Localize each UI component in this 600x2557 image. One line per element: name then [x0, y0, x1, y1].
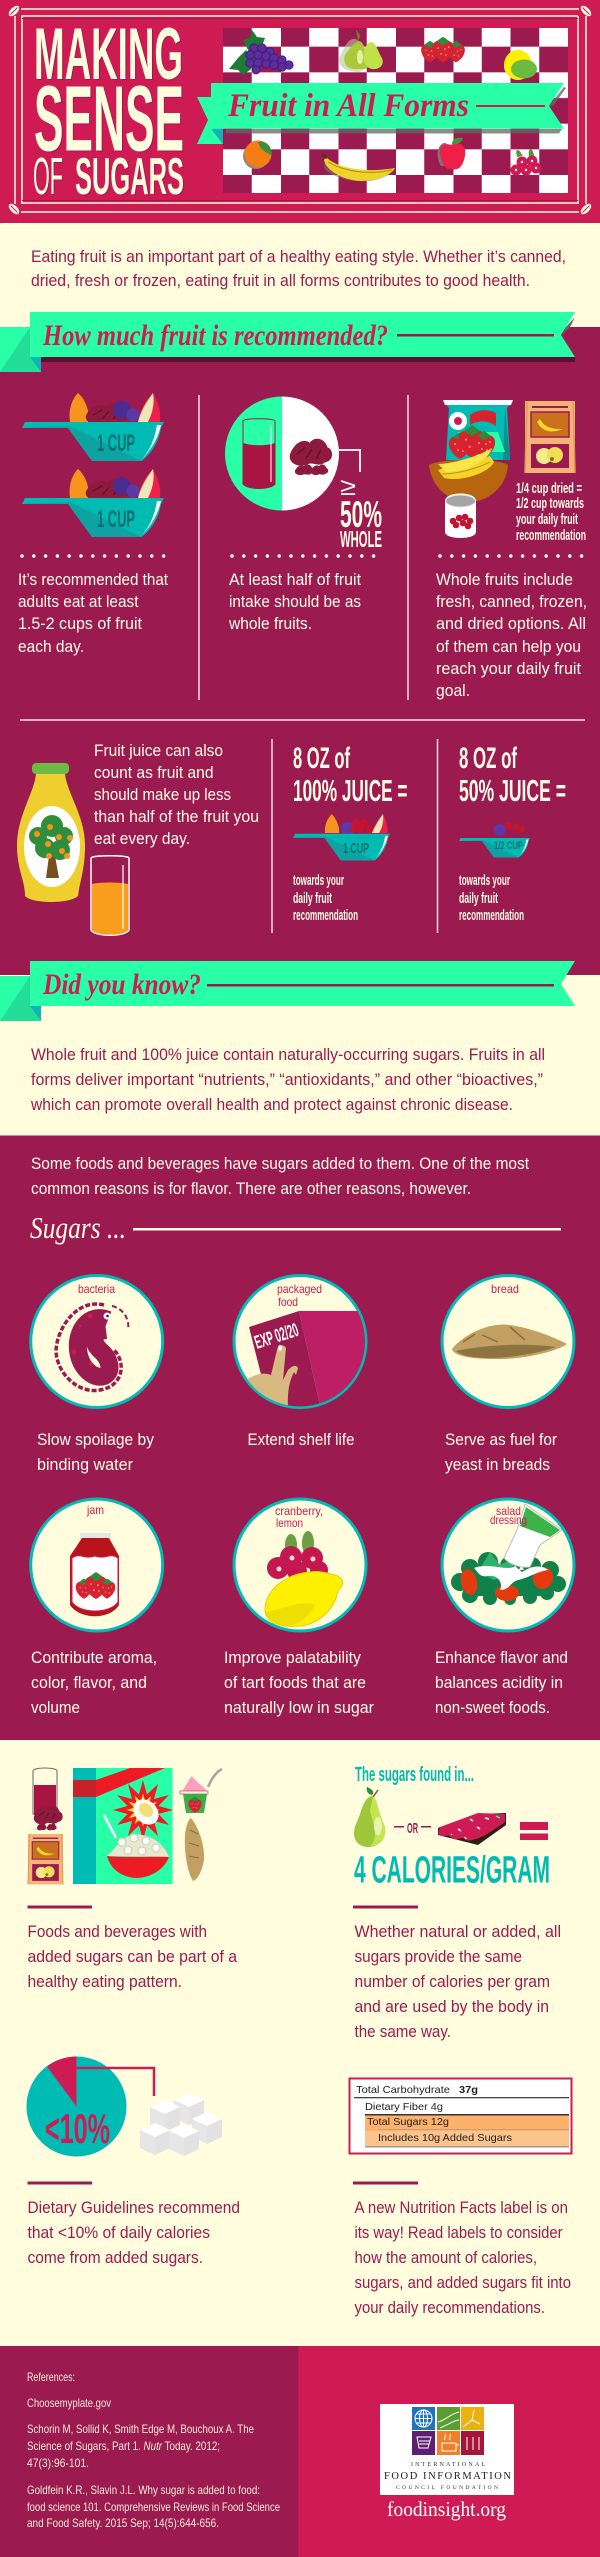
caption: whole fruits.	[228, 615, 312, 633]
icon: glass of juice	[91, 856, 129, 935]
icon: one-cup bowl with fruit	[22, 393, 164, 461]
website url: foodinsight.org	[387, 2497, 506, 2521]
icon: one cup juice bowl	[293, 814, 390, 860]
icon: salad dressing circle	[442, 1499, 574, 1631]
caption: Improve palatability	[224, 1649, 362, 1667]
intro text: dried, fresh or frozen, eating fruit in all forms contributes to good health.	[31, 272, 530, 290]
references: References:	[27, 2370, 75, 2384]
label: or: OR	[407, 1820, 418, 1837]
label: at least 50% whole	[340, 473, 382, 552]
chart: half and half circle	[225, 396, 339, 510]
icon: frozen strawberry bag	[443, 400, 513, 460]
icon: jam jar circle: jam	[86, 1503, 104, 1517]
icon: salad dressing circle: dressing	[490, 1513, 527, 1527]
panel: half whole fruit	[225, 396, 382, 633]
references: and Food Safety. 2015 Sep; 14(5):644-656.	[27, 2516, 219, 2530]
references: 47(3):96-101.	[27, 2456, 89, 2470]
logo: International Food Information Council Foundation: INTERNATIONAL	[411, 2462, 485, 2468]
icon: yogurt	[180, 1769, 222, 1813]
text: added sugars can be part of a	[28, 1948, 238, 1966]
icon: packaged food circle	[234, 1276, 370, 1410]
text: count as fruit and	[94, 764, 214, 782]
checkerboard tablecloth	[223, 28, 568, 193]
icon: orange	[243, 140, 272, 169]
ribbon: Did you know?: Did you know?	[42, 968, 201, 1001]
ribbon: Fruit in All Forms: Fruit in All Forms	[227, 88, 469, 124]
icon: cranberry and lemon circle: lemon	[276, 1516, 303, 1530]
caption	[445, 1431, 557, 1474]
icon: cranberries	[510, 150, 542, 176]
caption: yeast in breads	[445, 1456, 550, 1474]
icon: cranberry and lemon circle	[234, 1499, 366, 1631]
caption: Enhance flavor and	[435, 1649, 568, 1667]
text: added sugars intro: Some foods and beverages have sugars added to them. One of the most	[31, 1155, 529, 1173]
caption: volume	[31, 1699, 80, 1717]
title	[33, 14, 184, 206]
title: OF	[33, 148, 63, 206]
100% juice equation: recommendation	[293, 908, 358, 924]
icon: frosted cake	[438, 1813, 506, 1845]
panel: foods with added sugars	[28, 1768, 238, 1991]
caption: Slow spoilage by	[37, 1431, 155, 1449]
text: added sugars intro	[31, 1155, 529, 1198]
caption: fresh, canned, frozen,	[436, 593, 587, 611]
text: than half of the fruit you	[94, 808, 259, 826]
text: did you know: forms deliver important “nutrients,” “antioxidants,” and other “bioactives,”	[31, 1071, 543, 1089]
50% juice equation: towards your	[459, 873, 510, 889]
icon: one-cup bowl with fruit: 1 CUP	[97, 430, 135, 457]
100% juice equation: towards your	[293, 873, 344, 889]
caption	[228, 571, 361, 633]
caption: 1.5-2 cups of fruit	[18, 615, 142, 633]
panel: nutrition facts	[350, 2078, 572, 2317]
icon: apple	[438, 138, 465, 169]
caption: Contribute aroma,	[31, 1649, 157, 1667]
caption: goal.	[436, 682, 470, 700]
caption: naturally low in sugar	[224, 1699, 374, 1717]
icon: strawberries	[421, 37, 465, 62]
panel: yeast fuel	[442, 1276, 574, 1474]
references: Schorin M, Sollid K, Smith Edge M, Bouchoux A. The	[27, 2422, 254, 2436]
rule	[353, 2182, 418, 2184]
nutrition label: Total Carbohydrate	[356, 2084, 450, 2096]
ornamental frame	[7, 4, 593, 216]
panel: aroma	[31, 1499, 163, 1717]
panel: palatability	[224, 1499, 374, 1717]
icon: cereal box	[73, 1768, 173, 1884]
icon: grapes	[229, 30, 293, 75]
nutrition label: Includes 10g Added Sugars	[378, 2132, 512, 2144]
icon: juice bottle	[17, 763, 85, 902]
panel: shelf life	[234, 1276, 370, 1449]
50% juice equation	[459, 742, 566, 924]
rule	[28, 2182, 92, 2184]
icon: sugar cubes	[140, 2093, 222, 2156]
icon: bacteria circle	[31, 1276, 163, 1408]
ribbon: How much fruit is recommended?: How much fruit is recommended?	[42, 319, 388, 352]
nutrition label: Total Sugars 12g	[367, 2116, 449, 2128]
caption: At least half of fruit	[229, 571, 361, 589]
header banner	[0, 0, 600, 223]
panel: daily cups	[18, 393, 168, 656]
text	[28, 1923, 238, 1991]
icon: pear	[354, 1787, 385, 1847]
arrow: bracket to label	[339, 450, 360, 472]
caption: balances acidity in	[435, 1674, 563, 1692]
rule	[28, 1906, 92, 1908]
text: healthy eating pattern.	[28, 1973, 182, 1991]
arrow: bracket to sugar cubes	[76, 2068, 154, 2096]
text: come from added sugars.	[28, 2249, 203, 2267]
caption: It’s recommended that	[18, 571, 168, 589]
icon: packaged food circle: food	[278, 1295, 298, 1309]
text: WHOLE	[340, 526, 382, 552]
references: Science of Sugars, Part 1. Nutr Today. 2012;	[27, 2439, 220, 2453]
panel: fruit forms	[429, 400, 587, 700]
panel: calories per gram	[353, 1764, 561, 2041]
text: your daily recommendations.	[354, 2299, 545, 2317]
icon: bread circle	[442, 1276, 574, 1408]
text: number of calories per gram	[354, 1973, 550, 1991]
50% juice equation: recommendation	[459, 908, 524, 924]
text: how the amount of calories,	[354, 2249, 537, 2267]
ribbon: How much fruit is recommended?	[0, 312, 575, 372]
50% juice equation: 8 OZ of	[459, 742, 518, 775]
icon: dried banana package	[28, 1834, 63, 1884]
caption	[31, 1649, 157, 1717]
chart: pie under 10 percent: <10%	[45, 2105, 110, 2152]
panel: flavor balance	[435, 1499, 574, 1717]
caption: and dried options. All	[436, 615, 586, 633]
logo squares	[412, 2407, 484, 2455]
rule	[353, 1906, 418, 1908]
caption	[37, 1431, 155, 1474]
logo: International Food Information Council Foundation	[380, 2404, 514, 2495]
ribbon: Did you know?	[0, 961, 575, 1021]
caption: Whole fruits include	[436, 571, 573, 589]
text: Dietary Guidelines recommend	[28, 2199, 240, 2217]
icon: lemon and lime	[504, 50, 537, 80]
icon: one cup juice bowl: 1 CUP	[343, 840, 369, 857]
equals sign	[520, 1822, 548, 1840]
text: added sugars intro: common reasons is for flavor. There are other reasons, however.	[31, 1180, 471, 1198]
icon: juice and raisins	[33, 1768, 63, 1830]
logo: International Food Information Council Foundation: COUNCIL FOUNDATION	[396, 2485, 498, 2491]
text: should make up less	[94, 786, 231, 804]
panel: juice	[17, 742, 566, 935]
caption: of them can help you	[436, 638, 581, 656]
icon: bowl of bananas	[429, 448, 508, 502]
references: food science 101. Comprehensive Reviews in Food Science	[27, 2500, 280, 2514]
100% juice equation: daily fruit	[293, 891, 332, 907]
label: at least 50% whole: 50%	[340, 494, 382, 535]
heading: Sugars: Sugars ...	[30, 1210, 126, 1245]
nutrition label: Dietary Fiber 4g	[365, 2101, 443, 2113]
icon: canned fruit	[445, 494, 476, 538]
caption: of tart foods that are	[224, 1674, 366, 1692]
100% juice equation: 8 OZ of	[293, 742, 351, 775]
caption: intake should be as	[229, 593, 361, 611]
icon: pears	[339, 30, 383, 72]
caption: adults eat at least	[18, 593, 139, 611]
text	[354, 1923, 561, 2041]
nutrition label: 37g	[459, 2084, 478, 2096]
caption	[436, 571, 587, 700]
icon: salad dressing circle: salad	[496, 1504, 521, 1518]
caption: Extend shelf life	[248, 1431, 354, 1449]
header banner: SUGARS	[75, 148, 184, 206]
icon: packaged food circle: EXP 02/20	[252, 1320, 301, 1354]
text: A new Nutrition Facts label is on	[354, 2199, 568, 2217]
intro text	[31, 248, 566, 290]
text: did you know	[30, 1046, 545, 1114]
references	[27, 2370, 280, 2530]
icon: half cup juice bowl	[459, 822, 530, 858]
text: Whether natural or added, all	[354, 1923, 561, 1941]
heading: The sugars found in...	[355, 1764, 474, 1786]
icon: banana	[322, 154, 396, 181]
header banner: SENSE	[34, 66, 184, 170]
title: MAKING	[34, 14, 183, 95]
caption: color, flavor, and	[31, 1674, 147, 1692]
icon: bacteria circle: bacteria	[78, 1282, 115, 1296]
caption	[435, 1649, 568, 1717]
text: sugars provide the same	[354, 1948, 522, 1966]
intro text: Eating fruit is an important part of a healthy eating style. Whether it’s canned,	[31, 248, 566, 266]
logo: International Food Information Council Foundation: FOOD INFORMATION	[384, 2471, 511, 2482]
caption: reach your daily fruit	[436, 660, 581, 678]
caption	[224, 1649, 374, 1717]
icon: second one-cup bowl with fruit: 1 CUP	[97, 506, 135, 533]
label: dried fruit equivalence	[516, 480, 586, 544]
text: sugars, and added sugars fit into	[354, 2274, 571, 2292]
icon: dried banana package	[525, 401, 575, 473]
icon: bread circle: bread	[491, 1282, 519, 1296]
caption: non-sweet foods.	[435, 1699, 550, 1717]
text: Fruit juice can also	[94, 742, 223, 760]
caption	[18, 571, 168, 656]
caption: binding water	[37, 1456, 133, 1474]
caption: Serve as fuel for	[445, 1431, 557, 1449]
caption: each day.	[18, 638, 84, 656]
icon: baguette	[185, 1818, 204, 1881]
50% juice equation: daily fruit	[459, 891, 498, 907]
chart: pie under 10 percent	[26, 2056, 126, 2156]
label: at least 50% whole: ≥	[340, 473, 356, 501]
panel: slow spoilage	[31, 1276, 163, 1474]
text	[94, 742, 259, 848]
ribbon: Fruit in All Forms	[197, 83, 566, 144]
text: that <10% of daily calories	[28, 2224, 210, 2242]
text	[354, 2199, 571, 2317]
icon: cranberry and lemon circle: cranberry,	[275, 1504, 323, 1518]
text: and are used by the body in	[354, 1998, 549, 2016]
icon: second one-cup bowl with fruit	[22, 469, 164, 537]
panel: dietary guidelines	[26, 2056, 240, 2267]
references: Choosemyplate.gov	[27, 2396, 111, 2410]
text: eat every day.	[94, 830, 190, 848]
text	[28, 2199, 240, 2267]
text: Foods and beverages with	[28, 1923, 207, 1941]
text: did you know: which can promote overall health and protect against chronic disease.	[30, 1096, 513, 1114]
icon: half cup juice bowl: 1/2 CUP	[494, 840, 523, 852]
100% juice equation: 100% JUICE =	[293, 773, 408, 808]
100% juice equation	[293, 742, 408, 924]
text: the same way.	[354, 2023, 451, 2041]
nutrition label	[350, 2078, 572, 2154]
references: Goldfein K.R., Slavin J.L. Why sugar is added to food:	[27, 2483, 260, 2497]
icon: jam jar circle	[31, 1499, 163, 1631]
text: did you know: Whole fruit and 100% juice contain naturally-occurring sugars. Fruits in all	[31, 1046, 545, 1064]
text: its way! Read labels to consider	[354, 2224, 563, 2242]
label: or	[394, 1820, 431, 1837]
icon: packaged food circle: packaged	[277, 1282, 322, 1296]
